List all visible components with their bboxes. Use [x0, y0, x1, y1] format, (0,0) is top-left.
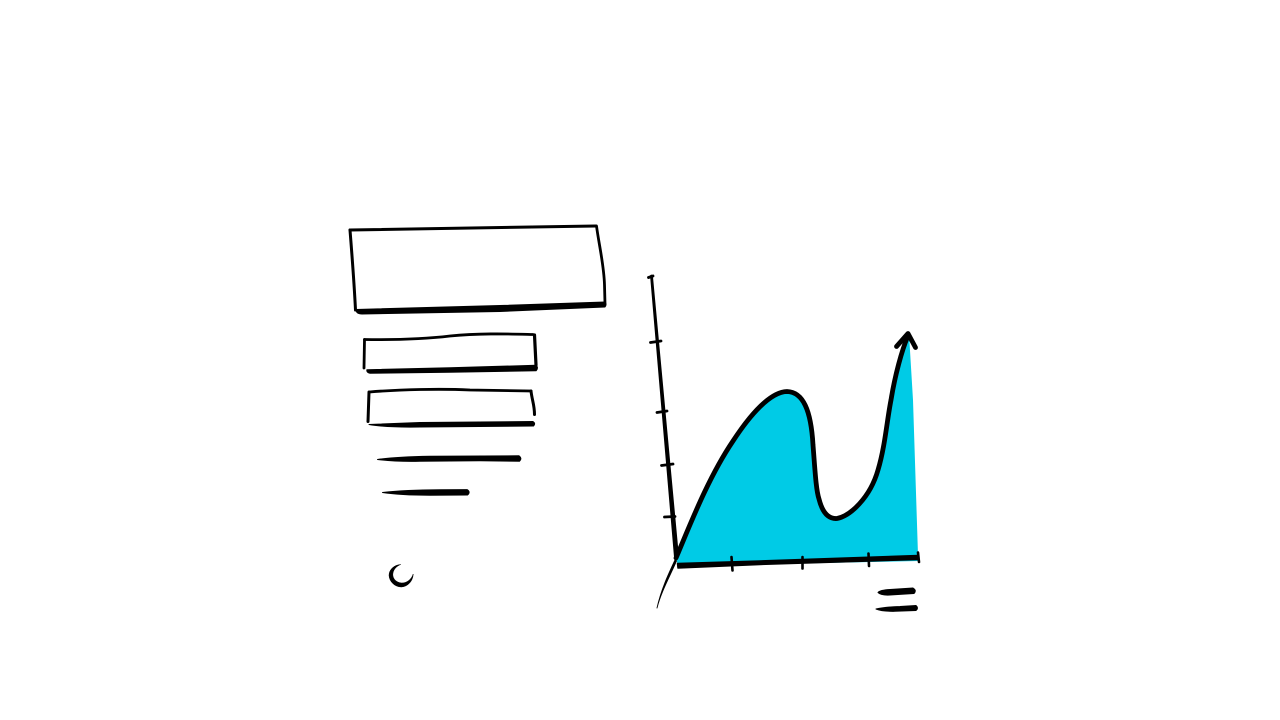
panel: text box one [364, 334, 537, 373]
area fill [676, 334, 919, 566]
panel: large title box [350, 226, 606, 314]
panel: text box two [368, 389, 535, 427]
x axis ticks [732, 552, 919, 570]
origin extension stroke [657, 560, 676, 608]
axis label line one [878, 588, 915, 595]
text line one [378, 456, 521, 461]
axis label line two [876, 606, 918, 611]
trend curve [676, 337, 908, 558]
x axis [678, 556, 918, 568]
arrowhead [896, 334, 916, 348]
y axis ticks [648, 276, 675, 517]
icon: loading ring [389, 564, 413, 587]
text line two [382, 490, 469, 495]
chart: area chart with axes [648, 276, 919, 608]
y axis [652, 276, 678, 558]
